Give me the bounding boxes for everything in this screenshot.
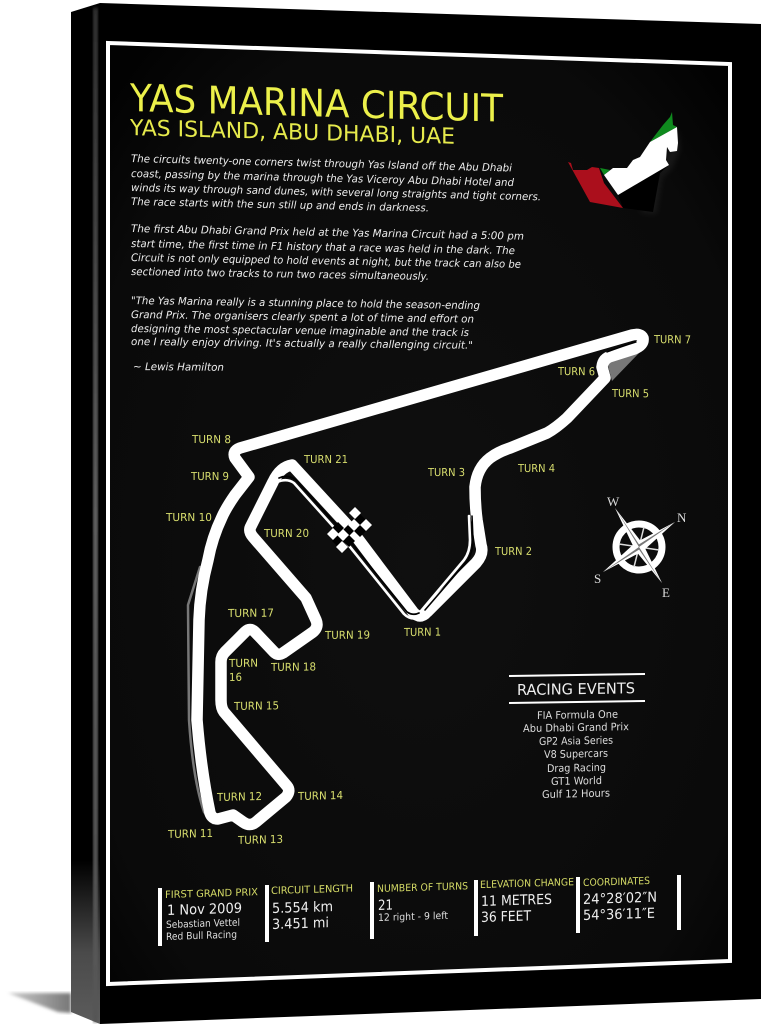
turn labels: TURN 17 <box>227 607 274 620</box>
turn labels: TURN 20 <box>263 527 309 540</box>
racing events list: Gulf 12 Hours <box>542 787 610 801</box>
turn labels: TURN 11 <box>167 827 213 841</box>
paragraph 3: quote: Grand Prix. The organisers clearly spent a lot of time and effort on <box>131 309 474 326</box>
racing events list: FIA Formula One <box>537 709 618 722</box>
paragraph 3: quote: one I really enjoy driving. It's actually a really challenging circuit." <box>131 336 473 352</box>
racetrack map <box>188 334 643 824</box>
turn labels: TURN 9 <box>190 470 229 483</box>
pit lane: gap and lane <box>277 342 636 618</box>
racing events list: GP2 Asia Series <box>539 735 613 748</box>
canvas side spine <box>71 3 100 1024</box>
stats strip <box>158 875 681 946</box>
paragraph 2: Circuit is not only equipped to hold events at night, but the track can also be <box>131 252 521 271</box>
paragraph 1 <box>131 153 541 214</box>
poster background <box>107 42 731 985</box>
stat: first grand prix <box>158 887 258 946</box>
stat: first grand prix: 1 Nov 2009 <box>167 901 242 919</box>
subtitle: YAS ISLAND, ABU DHABI, UAE <box>129 116 455 150</box>
paragraph 2: start time, the first time in F1 history that a race was held in the dark. The <box>131 238 515 257</box>
paragraph 1: winds its way through sand dunes, with several long straights and tight corners. <box>131 182 541 203</box>
attribution: ~ Lewis Hamilton <box>133 361 224 374</box>
turn labels <box>165 333 691 847</box>
paragraph 2: The first Abu Dhabi Grand Prix held at the Yas Marina Circuit had a 5:00 pm <box>131 223 524 243</box>
icon: UAE flag map <box>568 112 680 214</box>
paragraph 3: quote: designing the most spectacular venue imaginable and the track is <box>131 323 470 339</box>
stat: elevation change: ELEVATION CHANGE <box>480 877 574 891</box>
turn labels: TURN 10 <box>165 511 212 524</box>
turn labels: TURN 14 <box>297 789 343 803</box>
stat: coordinates: 54°36′11″E <box>583 906 655 924</box>
stat: circuit length <box>265 884 353 942</box>
icon: compass rose: E <box>662 585 670 600</box>
stat: number of turns <box>370 881 468 939</box>
stat: first grand prix: FIRST GRAND PRIX <box>165 887 258 901</box>
main circuit <box>197 334 643 824</box>
turn labels: TURN 19 <box>324 629 370 642</box>
intro text block <box>131 153 541 374</box>
icon: compass rose: W <box>607 494 620 509</box>
racing events list: V8 Supercars <box>544 748 608 761</box>
paragraph 3: quote: "The Yas Marina really is a stunning place to hold the season-ending <box>131 295 480 312</box>
turn labels: TURN 15 <box>233 699 279 713</box>
stat: coordinates: COORDINATES <box>583 876 650 889</box>
turn labels: TURN 7 <box>653 333 691 346</box>
icon: start/finish checkered flag <box>327 507 372 553</box>
panel: racing events <box>509 673 645 801</box>
turn labels: TURN 4 <box>517 462 555 475</box>
cast shadow <box>8 993 71 1013</box>
turn labels: TURN 2 <box>494 545 532 558</box>
racing events heading: RACING EVENTS <box>517 679 635 699</box>
stat: circuit length: 3.451 mi <box>272 915 329 933</box>
turn labels: TURN 12 <box>216 790 262 804</box>
icon: compass rose: S <box>594 571 601 586</box>
turn labels: TURN 3 <box>427 466 465 479</box>
turn labels: TURN 1 <box>403 626 441 639</box>
stat: circuit length: CIRCUIT LENGTH <box>271 884 353 897</box>
icon: compass rose <box>594 494 687 600</box>
grey alternate track sections <box>188 352 640 823</box>
paragraph 1: coast, passing by the marina through the Yas Viceroy Abu Dhabi Hotel and <box>131 168 514 189</box>
racing events list: Drag Racing <box>547 762 606 775</box>
paragraph 2 <box>131 223 524 283</box>
turn labels: TURN 18 <box>270 660 316 674</box>
racing events list: GT1 World <box>551 775 602 788</box>
racing events list: Abu Dhabi Grand Prix <box>523 721 629 735</box>
stat: number of turns: 12 right - 9 left <box>378 911 448 924</box>
stat: elevation change <box>474 877 574 936</box>
white frame <box>108 43 730 984</box>
turn labels: TURN 6 <box>557 365 595 378</box>
turn labels: TURN 21 <box>303 453 348 466</box>
paragraph 3: quote <box>131 295 480 352</box>
turn labels: TURN <box>228 657 258 670</box>
stat: number of turns: NUMBER OF TURNS <box>377 881 468 895</box>
paragraph 1: The race starts with the sun still up and ends in darkness. <box>131 196 429 214</box>
stat: circuit length: 5.554 km <box>272 899 333 917</box>
stat: first grand prix: Sebastian Vettel <box>166 918 240 931</box>
stat: coordinates: 24°28′02″N <box>583 890 657 908</box>
icon: compass rose: N <box>677 510 687 525</box>
turn labels: TURN 5 <box>611 387 649 400</box>
title: YAS MARINA CIRCUIT <box>129 76 504 131</box>
stat: first grand prix: Red Bull Racing <box>166 930 237 943</box>
stat: elevation change: 36 FEET <box>481 908 531 926</box>
stat: number of turns: 21 <box>378 898 393 914</box>
turn labels: TURN 8 <box>191 433 231 446</box>
racing events list <box>523 709 629 801</box>
paragraph 2: sectioned into two tracks to run two races simultaneously. <box>131 266 429 283</box>
turn labels: 16 <box>229 671 242 684</box>
paragraph 1: The circuits twenty-one corners twist through Yas Island off the Abu Dhabi <box>131 153 512 174</box>
stat: coordinates <box>576 875 681 933</box>
turn labels: TURN 13 <box>237 833 283 847</box>
stat: elevation change: 11 METRES <box>481 892 552 910</box>
